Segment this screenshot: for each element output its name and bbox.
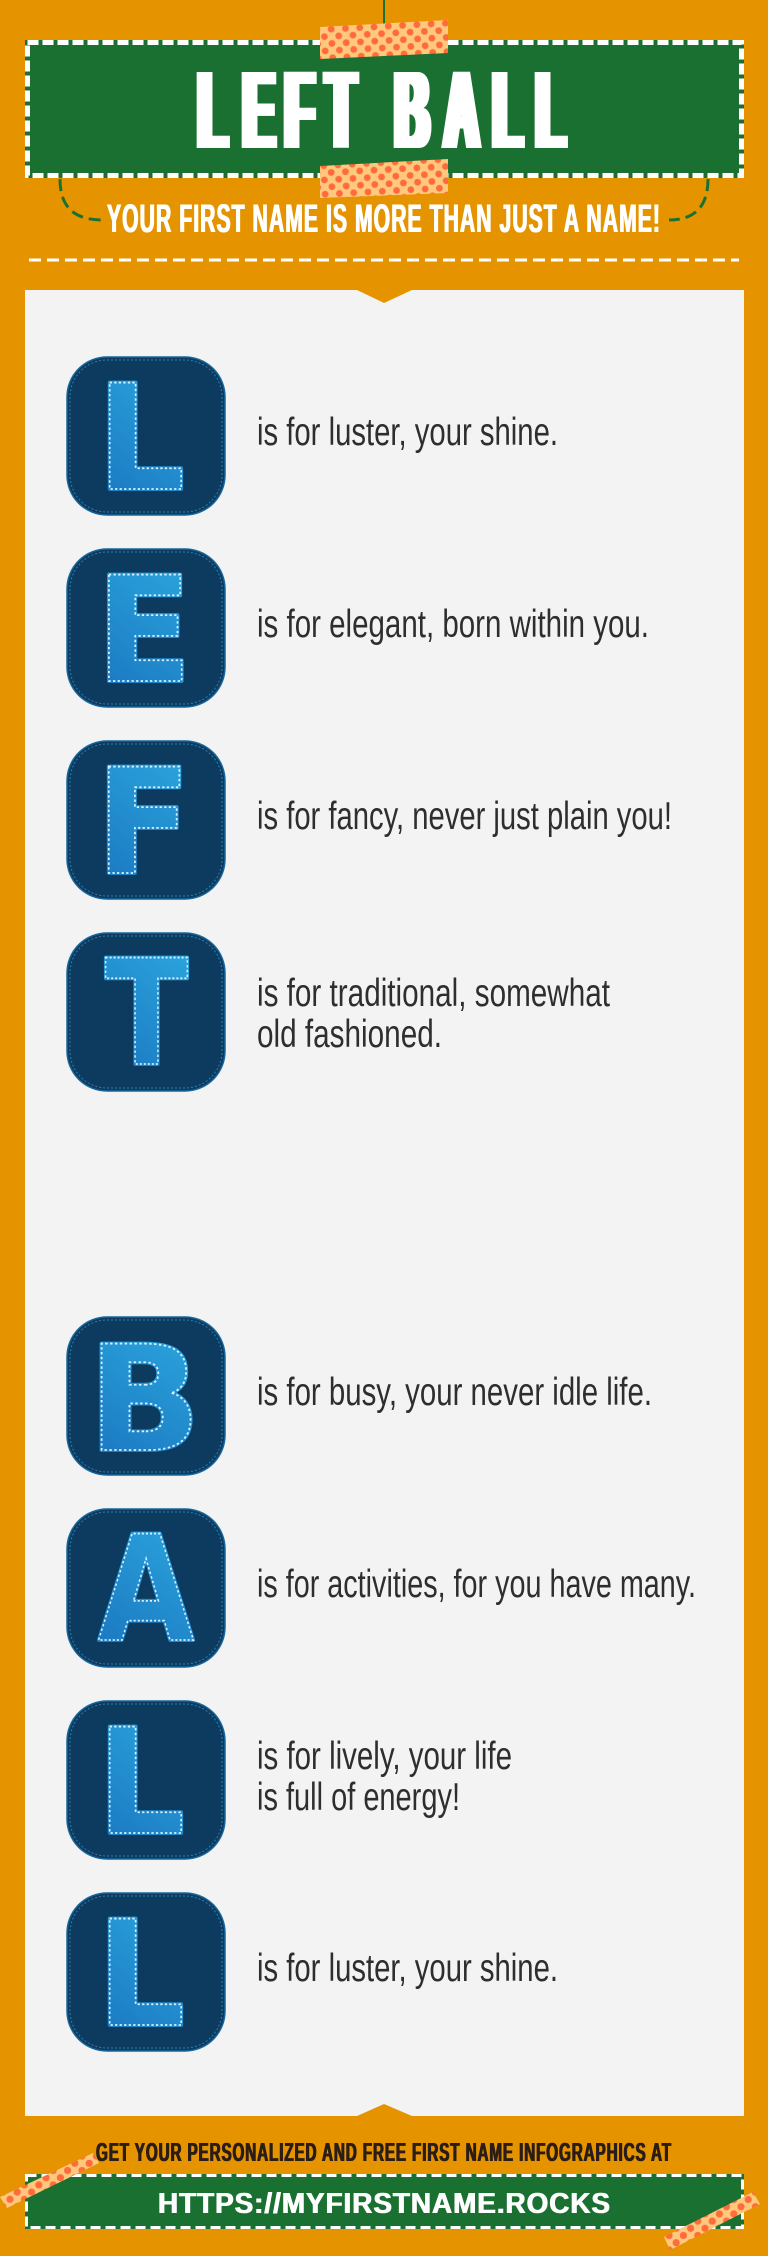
footer banner bbox=[25, 2174, 744, 2229]
text: L third: is for luster, your shine. bbox=[257, 1947, 558, 1990]
icon: L: L bbox=[97, 354, 185, 524]
icon: F: F bbox=[96, 738, 191, 908]
icon: A: A bbox=[98, 1505, 194, 1675]
icon: T bbox=[67, 929, 225, 1099]
row: E bbox=[67, 546, 649, 716]
icon: L second: L bbox=[97, 1698, 185, 1868]
title: LEFT BALL bbox=[198, 48, 565, 171]
tape: top bbox=[320, 20, 448, 59]
icon: L third: L bbox=[97, 1890, 185, 2060]
row: L second bbox=[67, 1698, 512, 1868]
icon: L second bbox=[67, 1698, 225, 1868]
row: B bbox=[67, 1315, 652, 1485]
panel: letters bbox=[25, 290, 744, 2116]
icon: L third: L bbox=[97, 1890, 185, 2060]
icon: T: T bbox=[105, 929, 188, 1099]
text: L second: is for lively, your life bbox=[257, 1735, 512, 1778]
text: T: old fashioned. bbox=[257, 1013, 442, 1056]
row: L bbox=[67, 354, 558, 524]
text: E: is for elegant, born within you. bbox=[257, 603, 649, 646]
subtitle connectors bbox=[60, 179, 708, 220]
tape: footer right bbox=[664, 2192, 760, 2250]
row: T bbox=[67, 929, 610, 1099]
icon: E: E bbox=[96, 546, 192, 716]
icon: L third bbox=[67, 1890, 225, 2060]
text: B: is for busy, your never idle life. bbox=[257, 1371, 652, 1414]
text: L: is for luster, your shine. bbox=[257, 411, 558, 454]
row: L third bbox=[67, 1890, 558, 2060]
text: T bbox=[257, 972, 610, 1056]
row: F bbox=[67, 738, 672, 908]
icon: E bbox=[67, 546, 225, 716]
icon: F bbox=[67, 738, 225, 908]
tape: bottom bbox=[320, 159, 448, 198]
icon: F: F bbox=[96, 738, 191, 908]
url: HTTPS://MYFIRSTNAME.ROCKS bbox=[158, 2188, 611, 2220]
icon: L bbox=[67, 354, 225, 524]
text: L second: is full of energy! bbox=[257, 1776, 460, 1819]
icon: B: B bbox=[88, 1315, 201, 1485]
title banner bbox=[25, 40, 744, 178]
icon: B: B bbox=[88, 1315, 201, 1485]
row: A bbox=[67, 1505, 696, 1675]
tape: footer left bbox=[0, 2153, 99, 2208]
icon: L second: L bbox=[97, 1698, 185, 1868]
icon: A: A bbox=[98, 1505, 194, 1675]
icon: T: T bbox=[105, 929, 188, 1099]
text: T: is for traditional, somewhat bbox=[257, 972, 610, 1015]
text: L second bbox=[257, 1735, 512, 1819]
icon: L: L bbox=[97, 354, 185, 524]
icon: E: E bbox=[96, 546, 192, 716]
hanging string bbox=[383, 0, 385, 26]
